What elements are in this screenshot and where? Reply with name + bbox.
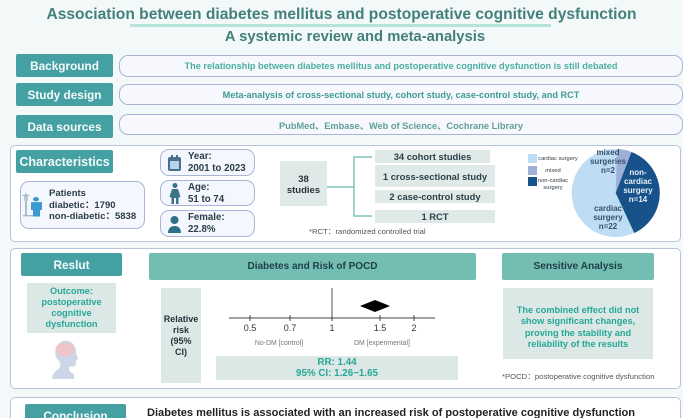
text: study design: Meta-analysis of cross-sectional study, cohort study, case-control study, and RCT xyxy=(223,90,579,100)
pie labels: mixed xyxy=(596,148,620,157)
pie labels: cardiac xyxy=(594,204,623,213)
pie chart: surgery types xyxy=(528,148,660,237)
box: outcome: dysfunction xyxy=(45,319,98,329)
box: sensitivity text: The combined effect did not xyxy=(517,305,639,315)
axis labels: 1.5 xyxy=(374,323,386,333)
text: age: 51 to 74 xyxy=(188,194,224,204)
bracket connector xyxy=(327,156,372,217)
box: cohort studies: 34 cohort studies xyxy=(394,151,471,162)
header: sensitive analysis xyxy=(502,253,654,280)
text: year xyxy=(188,151,246,174)
legend: surgery xyxy=(543,185,563,191)
pie labels: n=14 xyxy=(629,195,648,204)
box: relative risk: risk xyxy=(173,324,189,334)
icon: person xyxy=(170,183,180,204)
box: cross-sectional study xyxy=(375,165,495,187)
axis labels: 1 xyxy=(329,323,335,333)
box: sensitivity text: proving the stability and xyxy=(525,328,631,338)
label: background xyxy=(16,54,113,77)
icon: calendar xyxy=(168,155,181,171)
direction labels xyxy=(255,340,410,347)
card: female xyxy=(160,210,255,237)
box: case-control study xyxy=(375,190,495,203)
legend: mixed xyxy=(545,168,561,174)
text: background: The relationship between diabetes mellitus and postoperative cognitive dysfunction is still debated xyxy=(185,61,617,71)
header: sensitive analysis: Sensitive Analysis xyxy=(533,261,623,272)
pie labels xyxy=(590,148,653,231)
pie slices xyxy=(572,149,660,237)
forest plot xyxy=(229,288,435,347)
box: outcome xyxy=(27,283,116,333)
box: relative risk: Relative xyxy=(164,314,198,324)
text: female: Female: xyxy=(188,212,225,223)
legend: cardiac surgery xyxy=(538,156,578,162)
label: data sources: Data sources xyxy=(27,120,102,134)
diamond: pooled effect xyxy=(360,300,390,312)
axis labels: 2 xyxy=(411,323,417,333)
pie labels: n=2 xyxy=(601,166,616,175)
label: characteristics xyxy=(16,150,113,173)
box: outcome: Outcome: xyxy=(50,286,93,296)
header: diabetes and risk of POCD: Diabetes and Risk of POCD xyxy=(247,261,378,272)
box: RCT: 1 RCT xyxy=(421,211,449,222)
label: study design xyxy=(16,83,113,106)
card: age xyxy=(160,180,255,206)
axis labels xyxy=(244,323,417,333)
pie labels: non- xyxy=(629,168,647,177)
panel: characteristics xyxy=(10,145,681,242)
label: conclusion xyxy=(25,404,126,418)
card: year xyxy=(160,149,255,176)
box: sensitivity text xyxy=(503,288,653,359)
box: outcome: postoperative xyxy=(41,297,102,307)
panel: results xyxy=(10,248,681,389)
box: RCT xyxy=(375,210,495,223)
icon: patient with IV drip xyxy=(23,194,42,216)
pie labels: surgeries xyxy=(590,157,627,166)
box: cross-sectional study: 1 cross-sectional study xyxy=(383,170,487,182)
box: 38 studies: studies xyxy=(287,184,320,196)
axis labels: 0.7 xyxy=(284,323,296,333)
card: patients xyxy=(20,181,145,229)
text: patient counts: Patients xyxy=(49,188,86,199)
footnote: RCT: *RCT：randomized controlled trial xyxy=(309,227,426,236)
box: outcome: cognitive xyxy=(51,308,92,318)
direction labels: DM [experimental] xyxy=(354,340,410,347)
title: Association between diabetes mellitus and postoperative cognitive dysfunction xyxy=(46,6,637,23)
pie labels: cardiac xyxy=(624,177,653,186)
text: patient counts xyxy=(49,188,136,222)
box: 38 studies xyxy=(280,161,327,206)
text: female: 22.8% xyxy=(188,224,215,234)
box: sensitivity text: show significant changes, xyxy=(521,316,635,326)
text: patient counts: non-diabetic：5838 xyxy=(49,211,136,222)
direction labels: No-DM [control] xyxy=(255,340,303,347)
box: RR result: RR: 1.44 xyxy=(317,357,357,368)
legend: non-cardiac xyxy=(538,178,568,184)
text: patient counts: diabetic：1790 xyxy=(49,200,116,210)
pie labels: surgery xyxy=(593,213,623,222)
label: characteristics: Characteristics xyxy=(19,154,110,168)
title underline xyxy=(130,24,551,27)
box: relative risk: CI) xyxy=(175,346,187,356)
label: data sources xyxy=(16,115,113,138)
legend xyxy=(528,154,578,191)
label: result xyxy=(21,253,122,276)
box: cohort studies xyxy=(375,150,490,163)
box: case-control study: 2 case-control study xyxy=(389,191,481,202)
box: RR result: 95% CI: 1.26−1.65 xyxy=(296,368,378,379)
text: background xyxy=(119,55,683,77)
text: female xyxy=(188,212,225,234)
pie labels: n=22 xyxy=(599,222,618,231)
box: RR result xyxy=(216,356,458,380)
icon: woman xyxy=(168,216,181,233)
panel: conclusion xyxy=(10,397,681,418)
text: data sources xyxy=(119,114,683,135)
text: year: 2001 to 2023 xyxy=(188,162,246,174)
label: result: Reslut xyxy=(53,258,90,272)
box: relative risk xyxy=(161,288,201,383)
text: age xyxy=(188,182,224,204)
pie labels: surgery xyxy=(623,186,653,195)
text: year: Year: xyxy=(188,151,212,162)
subtitle: A systemic review and meta-analysis xyxy=(225,29,485,45)
text: study design xyxy=(119,84,683,105)
footnote: POCD: *POCD：postoperative cognitive dysfunction xyxy=(502,372,655,381)
text: data sources: PubMed、Embase、Web of Science、Cochrane Library xyxy=(279,120,523,130)
label: study design: Study design xyxy=(27,88,102,102)
icon: head with brain xyxy=(52,340,78,379)
box: sensitivity text: reliability of the results xyxy=(528,339,628,349)
text: age: Age: xyxy=(188,182,210,193)
box: 38 studies: 38 xyxy=(298,174,309,184)
axis labels: 0.5 xyxy=(244,323,256,333)
label: background: Background xyxy=(30,58,99,72)
box: relative risk: (95% xyxy=(170,336,192,346)
header: diabetes and risk of POCD xyxy=(149,253,476,280)
